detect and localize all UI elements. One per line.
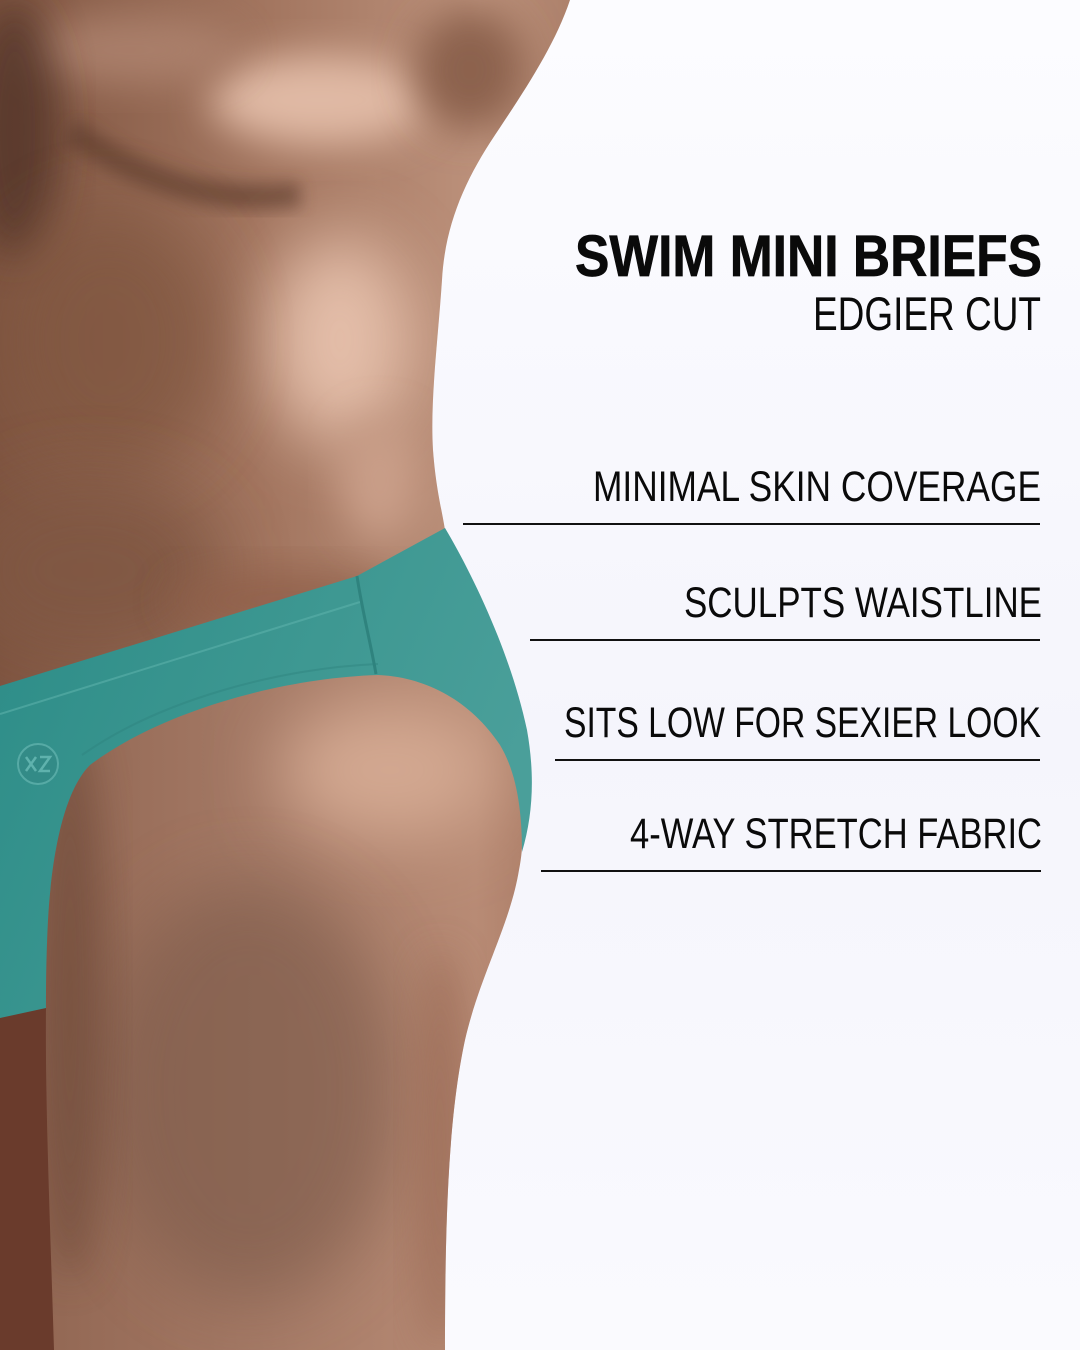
waistband stitching xyxy=(0,602,360,714)
photo: thigh xyxy=(46,675,522,1350)
heading block xyxy=(575,224,1042,340)
photo: torso xyxy=(0,0,600,710)
feature list xyxy=(463,463,1042,872)
icon: logo badge xyxy=(18,744,58,784)
side seam xyxy=(357,576,376,674)
swim mini briefs garment xyxy=(0,528,532,1018)
photo: shaded inner leg xyxy=(0,1005,54,1350)
leg opening hem xyxy=(82,664,378,755)
